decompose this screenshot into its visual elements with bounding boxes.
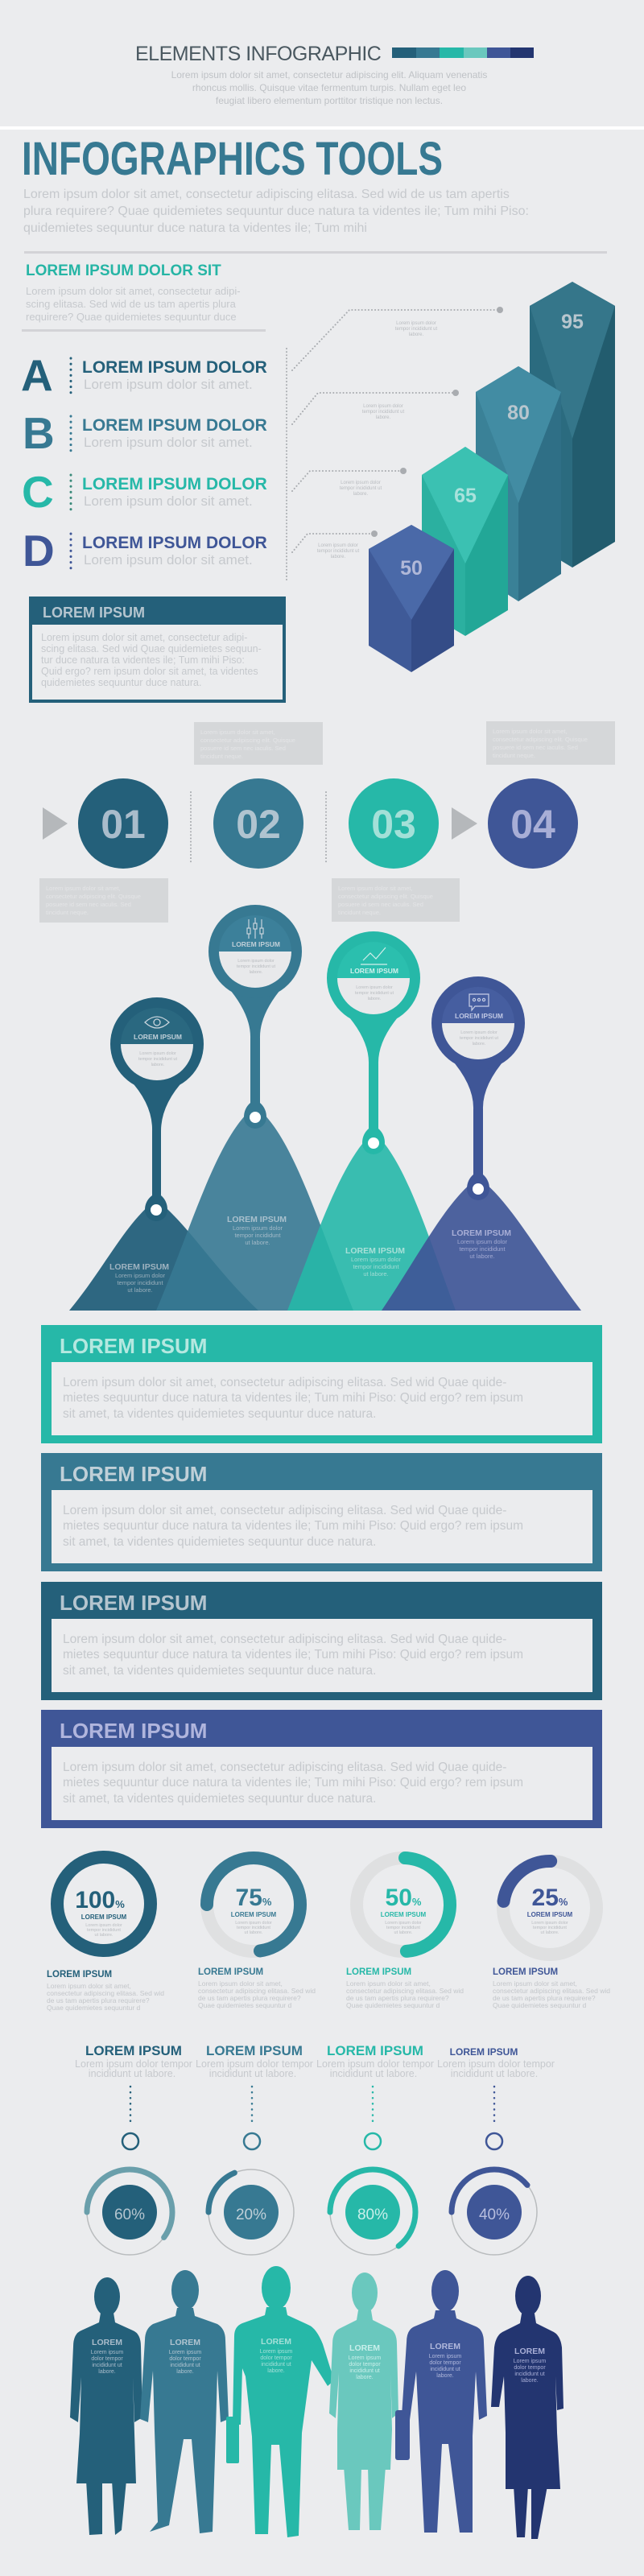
connector captions: Lorem ipsum dolor	[396, 321, 436, 326]
gauge 80	[330, 2169, 415, 2255]
step captions: consectetur adipiscing elit. Quisque	[493, 736, 588, 743]
callout box: Lorem ipsum dolor sit amet, consectetur adipi-	[41, 632, 247, 643]
item B	[23, 408, 267, 458]
donut captions: Lorem ipsum dolor sit amet,	[47, 1982, 131, 1990]
mountain labels: LOREM IPSUM	[345, 1246, 405, 1256]
person 4 woman: dolor tempor	[349, 2362, 381, 2368]
gauge 80: 80%	[357, 2207, 388, 2223]
bar 80: 80	[507, 402, 530, 424]
gauge section headings: incididunt ut labore.	[330, 2068, 417, 2079]
icon: line chart	[361, 947, 387, 964]
donut 100: Lorem ipsum dolor	[85, 1923, 122, 1928]
pin 3: tempor incididunt ut	[355, 991, 394, 996]
mountain labels	[109, 1215, 511, 1294]
circle 04	[488, 778, 578, 869]
pin 2: Lorem ipsum dolor	[237, 959, 275, 964]
donut 25: ut labore.	[541, 1930, 559, 1935]
panel 4: LOREM IPSUM	[60, 1719, 207, 1743]
mountain labels: ut labore.	[127, 1286, 153, 1294]
item D: D	[23, 526, 55, 576]
donut 100: ut labore.	[95, 1933, 114, 1938]
donut captions: LOREM IPSUM	[198, 1967, 263, 1977]
donut 75: ut labore.	[245, 1930, 263, 1935]
donut captions: Lorem ipsum dolor sit amet,	[198, 1979, 283, 1988]
bar 95	[530, 282, 615, 568]
connector captions	[317, 321, 438, 559]
header subtitle	[171, 69, 487, 106]
mountain labels: tempor incididunt	[459, 1245, 506, 1253]
person 1 woman	[70, 2277, 142, 2535]
item B: B	[23, 408, 55, 458]
mountain labels: tempor incididunt	[117, 1279, 163, 1286]
step captions	[39, 721, 615, 923]
circle 03: 03	[371, 802, 416, 847]
pin 4: Lorem ipsum dolor	[460, 1030, 497, 1035]
person 2 man: Lorem ipsum	[169, 2350, 201, 2355]
mountain labels: LOREM IPSUM	[227, 1215, 287, 1224]
mountain 1	[69, 1199, 258, 1311]
person 5 man with bag: dolor tempor	[429, 2360, 461, 2366]
step captions: consectetur adipiscing elit. Quisque	[200, 737, 295, 744]
item C: C	[22, 467, 54, 517]
mountain labels: tempor incididunt	[353, 1263, 399, 1270]
mountain labels: LOREM IPSUM	[452, 1228, 511, 1238]
person 3 man with phone: incididunt ut	[261, 2362, 291, 2368]
callout box	[29, 597, 286, 703]
gauge 60	[87, 2169, 172, 2255]
circle 04: 04	[510, 802, 555, 847]
gauge 40	[452, 2169, 537, 2255]
person 2 man: LOREM	[170, 2338, 200, 2347]
donut 75: 75%	[236, 1885, 272, 1911]
person 1 woman: incididunt ut	[92, 2363, 122, 2368]
mountain labels: ut labore.	[245, 1239, 270, 1246]
text panels	[41, 1325, 602, 1828]
mountain labels: Lorem ipsum dolor	[233, 1224, 283, 1232]
person 2 man: incididunt ut	[170, 2363, 200, 2368]
panel 3: sit amet, ta videntes quidemietes sequuntur duce natura.	[63, 1664, 376, 1678]
step captions: tincidunt neque.	[493, 752, 535, 759]
item B: Lorem ipsum dolor sit amet.	[84, 435, 253, 450]
donut 100	[57, 1857, 151, 1951]
mountain labels: Lorem ipsum dolor	[457, 1238, 508, 1245]
panel 3: LOREM IPSUM	[60, 1591, 207, 1615]
subheading: LOREM IPSUM DOLOR SIT	[26, 262, 221, 279]
donut captions: Quae quidemietes sequuntur d	[493, 2001, 587, 2009]
step captions: tincidunt neque.	[46, 909, 89, 916]
donut 75: tempor incididunt	[237, 1926, 270, 1930]
connector captions: labore.	[409, 332, 423, 337]
bar chart 3D	[369, 282, 615, 672]
connector captions: tempor incididunt ut	[340, 486, 382, 491]
donut captions: LOREM IPSUM	[346, 1967, 411, 1977]
pin 4: tempor incididunt ut	[460, 1036, 498, 1041]
mountain labels: Lorem ipsum dolor	[351, 1256, 402, 1263]
step captions: tincidunt neque.	[200, 753, 243, 760]
gauge section headings	[75, 2043, 555, 2079]
pin mountains chart	[69, 905, 581, 1311]
connector captions: labore.	[353, 492, 368, 497]
pin 3: Lorem ipsum dolor	[356, 985, 393, 990]
person 1 woman: Lorem ipsum	[91, 2350, 123, 2355]
donut 50	[355, 1856, 452, 1953]
donut 25: 25%	[532, 1885, 568, 1911]
mountain labels: Lorem ipsum dolor	[115, 1272, 166, 1279]
step captions: consectetur adipiscing elit. Quisque	[338, 893, 433, 900]
panel 1	[41, 1325, 602, 1443]
gauge section headings: LOREM IPSUM	[450, 2046, 518, 2058]
donut 50: LOREM IPSUM	[381, 1911, 427, 1918]
person 3 man with phone	[226, 2266, 334, 2537]
panel 4: mietes sequuntur duce natura ta videntes ile; Tum mihi Piso: Quid ergo? rem ipsum	[63, 1776, 523, 1790]
step captions: consectetur adipiscing elit. Quisque	[46, 893, 141, 900]
donut 25: Lorem ipsum dolor	[531, 1921, 568, 1926]
donut captions: de us tam apertis plura requirere?	[198, 1994, 301, 2002]
mountain labels: tempor incididunt	[234, 1232, 281, 1239]
item B: LOREM IPSUM DOLOR	[82, 416, 267, 435]
mountain 4	[382, 1178, 581, 1311]
person 6 woman: labore.	[521, 2378, 539, 2384]
bar 50	[369, 525, 454, 672]
donut 50: ut labore.	[394, 1930, 413, 1935]
donut 25: LOREM IPSUM	[527, 1911, 573, 1918]
list A-D	[21, 350, 267, 576]
person 6 woman: dolor tempor	[514, 2365, 546, 2371]
pin 3	[327, 931, 420, 1154]
item D: LOREM IPSUM DOLOR	[82, 534, 267, 552]
person 4 woman: Lorem ipsum	[349, 2355, 381, 2361]
people silhouettes	[70, 2266, 564, 2539]
step captions: posuere id sem nec iaculis. Sed	[493, 744, 578, 751]
step captions: Lorem ipsum dolor sit amet,	[46, 885, 121, 892]
mountain 3	[287, 1132, 456, 1311]
header subtitle: rhoncus mollis. Quisque vitae fermentum turpis. Nullam eget leo	[192, 82, 466, 93]
gauge section headings: incididunt ut labore.	[451, 2068, 538, 2079]
gauge 60: 60%	[114, 2207, 145, 2223]
intro paragraph: Lorem ipsum dolor sit amet, consectetur adipiscing elitasa. Sed wid de us tam apertis	[23, 188, 510, 201]
dotted connectors and rings	[122, 2087, 502, 2149]
donut 100: 100%	[75, 1887, 125, 1913]
mountain labels: ut labore.	[363, 1270, 389, 1278]
donut captions: Lorem ipsum dolor sit amet,	[493, 1979, 577, 1988]
pin 1: tempor incididunt ut	[138, 1057, 177, 1062]
step captions: Lorem ipsum dolor sit amet,	[338, 885, 413, 892]
step circles	[43, 778, 578, 869]
circle 01: 01	[101, 802, 146, 847]
sub paragraph	[26, 285, 241, 323]
mountain labels: ut labore.	[469, 1253, 495, 1260]
item D: Lorem ipsum dolor sit amet.	[84, 552, 253, 568]
item C	[22, 467, 267, 517]
panel 2: Lorem ipsum dolor sit amet, consectetur adipiscing elitasa. Sed wid Quae quide-	[63, 1504, 506, 1517]
gauge section headings: Lorem ipsum dolor tempor	[437, 2058, 555, 2070]
donut captions: Lorem ipsum dolor sit amet,	[346, 1979, 431, 1988]
pin 3: LOREM IPSUM	[350, 967, 398, 975]
donut captions	[47, 1967, 610, 2012]
pin 3: labore.	[368, 997, 382, 1001]
pin 1: Lorem ipsum dolor	[139, 1051, 176, 1056]
donut 25: tempor incididunt	[533, 1926, 567, 1930]
person 5 man with bag: LOREM	[430, 2342, 460, 2351]
donut 25	[497, 1855, 603, 1961]
person 2 man: labore.	[176, 2369, 194, 2375]
person 3 man with phone: labore.	[267, 2368, 285, 2374]
gauge section headings: incididunt ut labore.	[209, 2068, 296, 2079]
connector captions: tempor incididunt ut	[395, 327, 438, 332]
item A: Lorem ipsum dolor sit amet.	[84, 377, 253, 392]
step captions: tincidunt neque.	[338, 909, 381, 916]
intro paragraph	[23, 188, 529, 235]
panel 1: LOREM IPSUM	[60, 1334, 207, 1358]
gauge section headings: LOREM IPSUM	[85, 2043, 182, 2058]
donut 75: LOREM IPSUM	[231, 1911, 277, 1918]
donut captions: consectetur adipiscing elitasa. Sed wid	[47, 1989, 164, 1997]
pin 2	[208, 905, 302, 1129]
bar 65	[422, 447, 508, 636]
person 5 man with bag: Lorem ipsum	[429, 2354, 461, 2359]
donut charts	[57, 1855, 603, 1961]
gauge 40: 40%	[479, 2207, 510, 2223]
step captions: posuere id sem nec iaculis. Sed	[200, 745, 286, 752]
circle 02	[213, 778, 303, 869]
donut 50: 50%	[386, 1885, 422, 1911]
header subtitle: feugiat libero elementum porttitor tristique non lectus.	[216, 95, 443, 106]
main title: INFOGRAPHICS TOOLS	[22, 133, 443, 185]
gauge section headings: incididunt ut labore.	[89, 2068, 175, 2079]
header title	[135, 43, 534, 65]
panel 1: Lorem ipsum dolor sit amet, consectetur adipiscing elitasa. Sed wid Quae quide-	[63, 1376, 506, 1389]
item D	[23, 526, 267, 576]
donut captions: Quae quidemietes sequuntur d	[47, 2004, 141, 2012]
person 3 man with phone: LOREM	[261, 2337, 291, 2347]
step captions: posuere id sem nec iaculis. Sed	[338, 901, 423, 908]
person 2 man	[140, 2270, 229, 2533]
person 4 woman: incididunt ut	[349, 2368, 380, 2374]
gauge section headings: Lorem ipsum dolor tempor	[316, 2058, 434, 2070]
donut captions: de us tam apertis plura requirere?	[346, 1994, 449, 2002]
mountain labels: LOREM IPSUM	[109, 1262, 169, 1272]
panel 3: Lorem ipsum dolor sit amet, consectetur adipiscing elitasa. Sed wid Quae quide-	[63, 1633, 506, 1646]
callout box: tur duce natura ta videntes ile; Tum mihi Piso:	[41, 654, 245, 666]
panel 1: mietes sequuntur duce natura ta videntes ile; Tum mihi Piso: Quid ergo? rem ipsum	[63, 1391, 523, 1405]
gauge 20	[208, 2169, 294, 2255]
item A: LOREM IPSUM DOLOR	[82, 358, 267, 377]
pin 4: labore.	[473, 1042, 486, 1046]
callout box: quidemietes sequuntur duce natura.	[41, 677, 201, 688]
person 3 man with phone: dolor tempor	[260, 2355, 292, 2361]
panel 2: mietes sequuntur duce natura ta videntes ile; Tum mihi Piso: Quid ergo? rem ipsum	[63, 1519, 523, 1533]
donut 75: Lorem ipsum dolor	[235, 1921, 272, 1926]
donut captions: LOREM IPSUM	[493, 1967, 558, 1977]
person 5 man with bag: labore.	[436, 2373, 454, 2379]
gauge section headings: Lorem ipsum dolor tempor	[196, 2058, 313, 2070]
person 6 woman	[491, 2276, 564, 2539]
donut captions: consectetur adipiscing elitasa. Sed wid	[346, 1987, 464, 1995]
connector captions: tempor incididunt ut	[317, 549, 360, 554]
color bar	[392, 47, 534, 58]
arrow 1	[43, 807, 68, 840]
item A	[21, 350, 267, 400]
donut captions: de us tam apertis plura requirere?	[493, 1994, 596, 2002]
panel 3	[41, 1582, 602, 1700]
gauges	[87, 2169, 537, 2255]
person 4 woman: labore.	[356, 2375, 374, 2380]
step captions: Lorem ipsum dolor sit amet,	[493, 728, 568, 735]
callout box: scing elitasa. Sed wid Quae quidemietes sequun-	[41, 643, 262, 654]
intro paragraph: plura requirere? Quae quidemietes sequuntur duce natura ta videntes ile; Tum mihi Piso:	[23, 204, 529, 218]
step captions: Lorem ipsum dolor sit amet,	[200, 729, 275, 736]
mountain 2	[156, 1106, 353, 1311]
connector captions: tempor incididunt ut	[362, 410, 405, 415]
icon: eye	[145, 1017, 169, 1028]
panel 3: mietes sequuntur duce natura ta videntes ile; Tum mihi Piso: Quid ergo? rem ipsum	[63, 1648, 523, 1662]
person 6 woman: LOREM	[514, 2347, 545, 2356]
pin 2: LOREM IPSUM	[232, 940, 280, 948]
person 2 man: dolor tempor	[169, 2356, 201, 2362]
connector captions: labore.	[331, 555, 345, 559]
panel 4: Lorem ipsum dolor sit amet, consectetur adipiscing elitasa. Sed wid Quae quide-	[63, 1761, 506, 1774]
donut captions: consectetur adipiscing elitasa. Sed wid	[493, 1987, 610, 1995]
circle 01	[78, 778, 168, 869]
connector captions: labore.	[376, 415, 390, 420]
donut 75	[207, 1858, 300, 1951]
connector captions: Lorem ipsum dolor	[341, 481, 381, 485]
panel 2: sit amet, ta videntes quidemietes sequuntur duce natura.	[63, 1535, 376, 1549]
step captions: posuere id sem nec iaculis. Sed	[46, 901, 131, 908]
person 5 man with bag: incididunt ut	[430, 2367, 460, 2372]
pin 1	[110, 997, 204, 1221]
donut 50: tempor incididunt	[386, 1926, 420, 1930]
item C: LOREM IPSUM DOLOR	[82, 475, 267, 493]
panel 1: sit amet, ta videntes quidemietes sequuntur duce natura.	[63, 1407, 376, 1421]
connector lines	[287, 310, 500, 580]
donut captions: LOREM IPSUM	[47, 1970, 112, 1979]
sub paragraph: requirere? Quae quidemietes sequuntur duce	[26, 311, 237, 323]
arrow 2	[452, 807, 477, 840]
callout box: Quid ergo? rem ipsum dolor sit amet, ta videntes	[41, 666, 258, 677]
gauge section headings: LOREM IPSUM	[206, 2043, 303, 2058]
item C: Lorem ipsum dolor sit amet.	[84, 493, 253, 509]
icon: chat	[469, 994, 489, 1010]
circle 03	[349, 778, 439, 869]
callout box: LOREM IPSUM	[43, 605, 145, 621]
person 6 woman: incididunt ut	[514, 2372, 545, 2377]
bar 65: 65	[454, 485, 477, 507]
panel 2: LOREM IPSUM	[60, 1462, 207, 1486]
pin 2: labore.	[250, 970, 263, 975]
pin 4	[431, 976, 525, 1200]
bar 95: 95	[561, 311, 584, 333]
header title: ELEMENTS INFOGRAPHIC	[135, 43, 382, 65]
panel 4	[41, 1710, 602, 1828]
donut captions: Quae quidemietes sequuntur d	[198, 2001, 292, 2009]
person 6 woman: Lorem ipsum	[514, 2359, 546, 2364]
panel 4: sit amet, ta videntes quidemietes sequuntur duce natura.	[63, 1792, 376, 1806]
person 1 woman: dolor tempor	[91, 2356, 123, 2362]
person 3 man with phone: Lorem ipsum	[260, 2349, 292, 2355]
person 1 woman: LOREM	[92, 2338, 122, 2347]
icon: sliders	[247, 918, 263, 939]
gauge section headings: LOREM IPSUM	[327, 2043, 423, 2058]
person 5 man with bag	[395, 2270, 487, 2533]
donut captions: de us tam apertis plura requirere?	[47, 1996, 150, 2004]
pin 2: tempor incididunt ut	[237, 964, 275, 969]
pin 1: labore.	[151, 1063, 165, 1067]
donut 100: tempor incididunt	[87, 1928, 121, 1933]
item A: A	[21, 350, 53, 400]
sub paragraph: scing elitasa. Sed wid de us tam apertis plura	[26, 298, 237, 310]
gauge 20: 20%	[236, 2207, 266, 2223]
pin 1: LOREM IPSUM	[134, 1033, 182, 1041]
intro paragraph: quidemietes sequuntur duce natura ta videntes ile; Tum mihi	[23, 221, 367, 235]
bar 80	[476, 366, 561, 601]
donut 100: LOREM IPSUM	[81, 1913, 127, 1921]
pin 4: LOREM IPSUM	[455, 1012, 503, 1020]
sub paragraph: Lorem ipsum dolor sit amet, consectetur adipi-	[26, 285, 241, 297]
person 1 woman: labore.	[98, 2369, 116, 2375]
donut captions: Quae quidemietes sequuntur d	[346, 2001, 440, 2009]
panel 2	[41, 1453, 602, 1571]
person 4 woman: LOREM	[349, 2343, 380, 2353]
person 4 woman	[329, 2273, 398, 2530]
gauge section headings: Lorem ipsum dolor tempor	[75, 2058, 192, 2070]
circle 02: 02	[236, 802, 281, 847]
donut 50: Lorem ipsum dolor	[385, 1921, 422, 1926]
connector captions: Lorem ipsum dolor	[363, 404, 403, 409]
donut captions: consectetur adipiscing elitasa. Sed wid	[198, 1987, 316, 1995]
header subtitle: Lorem ipsum dolor sit amet, consectetur adipiscing elit. Aliquam venenatis	[171, 69, 487, 80]
bar 50: 50	[400, 557, 423, 580]
connector captions: Lorem ipsum dolor	[318, 543, 358, 548]
